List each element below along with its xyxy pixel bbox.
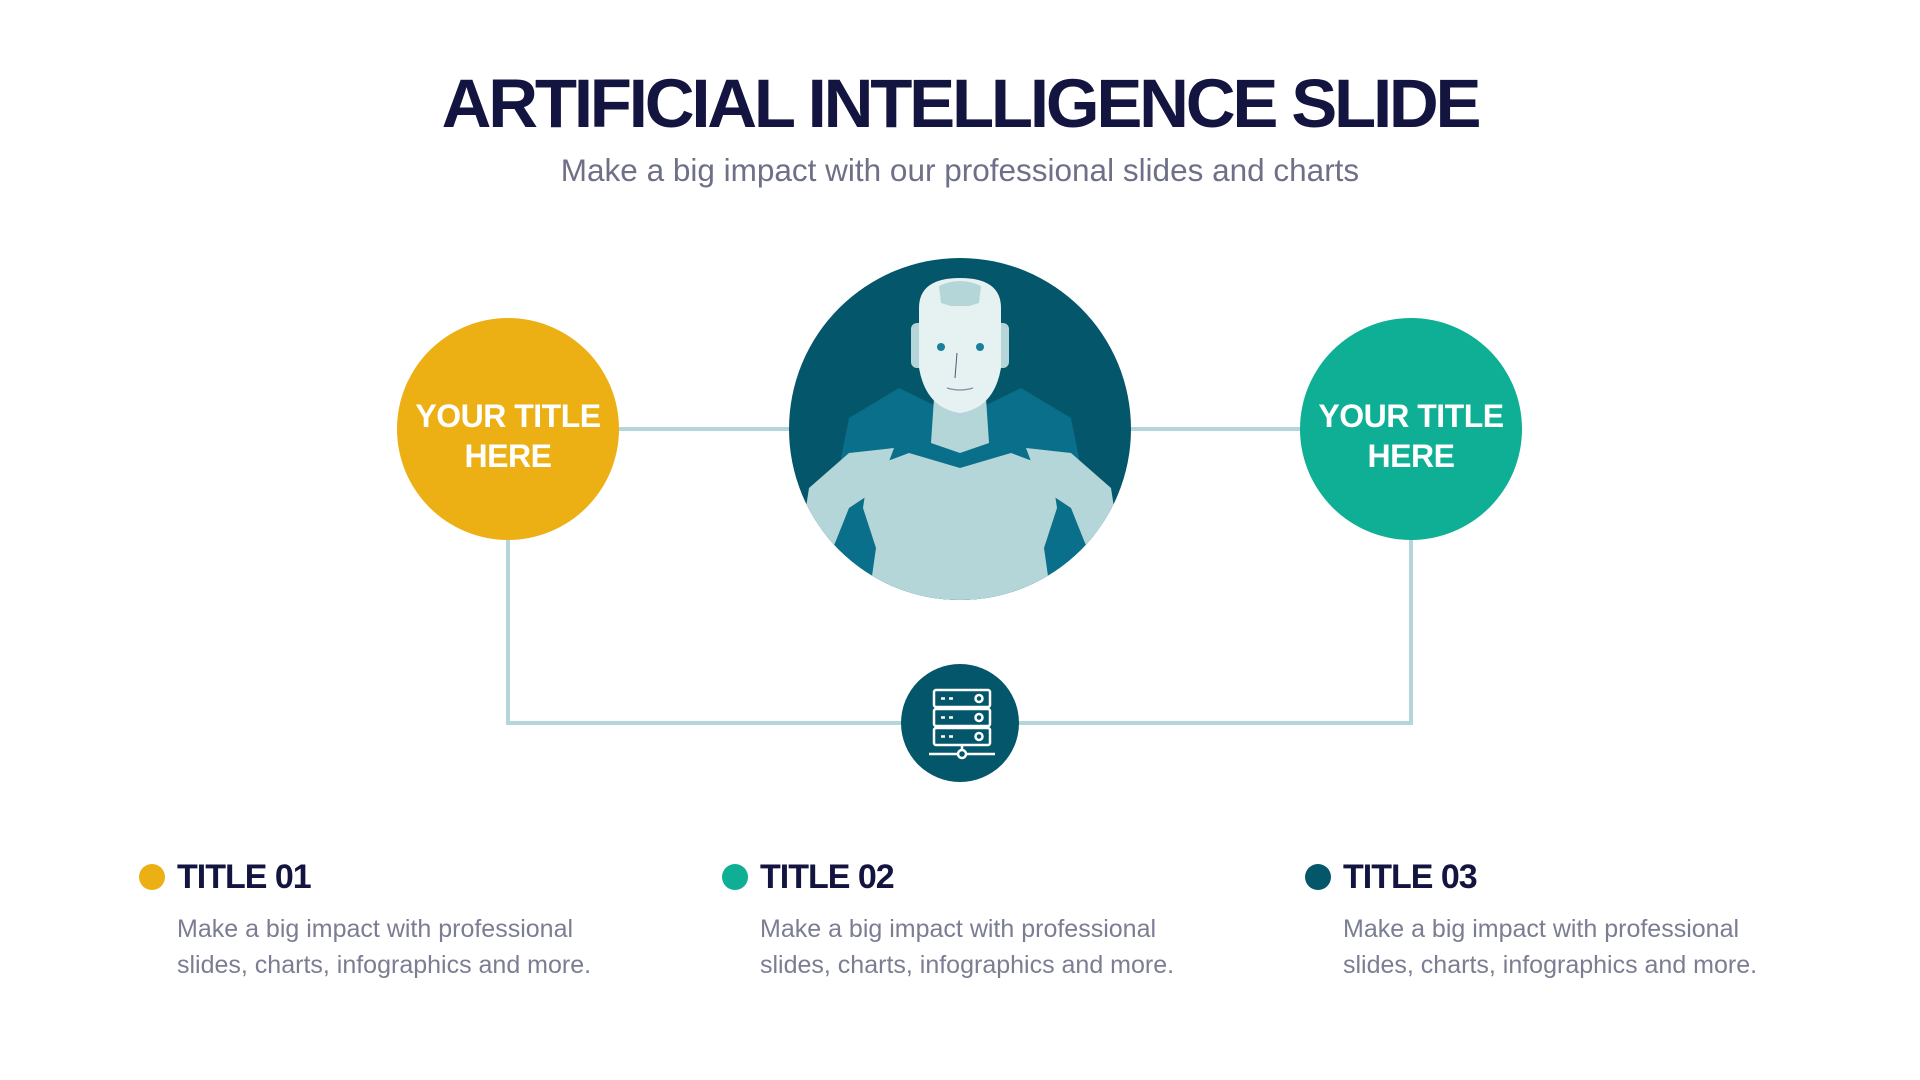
title: ARTIFICIAL INTELLIGENCE SLIDE bbox=[442, 65, 1478, 142]
text block: title 03: Make a big impact with professional slides, charts, infographics and more. bbox=[1343, 915, 1757, 979]
circle: right title bbox=[1300, 318, 1522, 540]
text block: title 03 bbox=[1305, 858, 1757, 979]
text block: title 01 bbox=[139, 858, 591, 979]
text block: title 02: TITLE 02 bbox=[760, 858, 894, 896]
circle: right title: HERE bbox=[1368, 438, 1454, 474]
circle: left title bbox=[397, 318, 619, 540]
text block: title 01: TITLE 01 bbox=[177, 858, 311, 896]
robot illustration bbox=[789, 258, 1131, 600]
text block: title 01: Make a big impact with professional slides, charts, infographics and more. bbox=[177, 915, 591, 979]
circle: right title: YOUR TITLE bbox=[1318, 398, 1504, 434]
circle: left title: HERE bbox=[465, 438, 551, 474]
circle: left title: YOUR TITLE bbox=[415, 398, 601, 434]
subtitle: Make a big impact with our professional slides and charts bbox=[561, 152, 1359, 188]
text block: title 02: Make a big impact with professional slides, charts, infographics and more. bbox=[760, 915, 1174, 979]
text block: title 03: TITLE 03 bbox=[1343, 858, 1477, 896]
text block: title 02 bbox=[722, 858, 1174, 979]
icon: server bbox=[901, 664, 1019, 782]
